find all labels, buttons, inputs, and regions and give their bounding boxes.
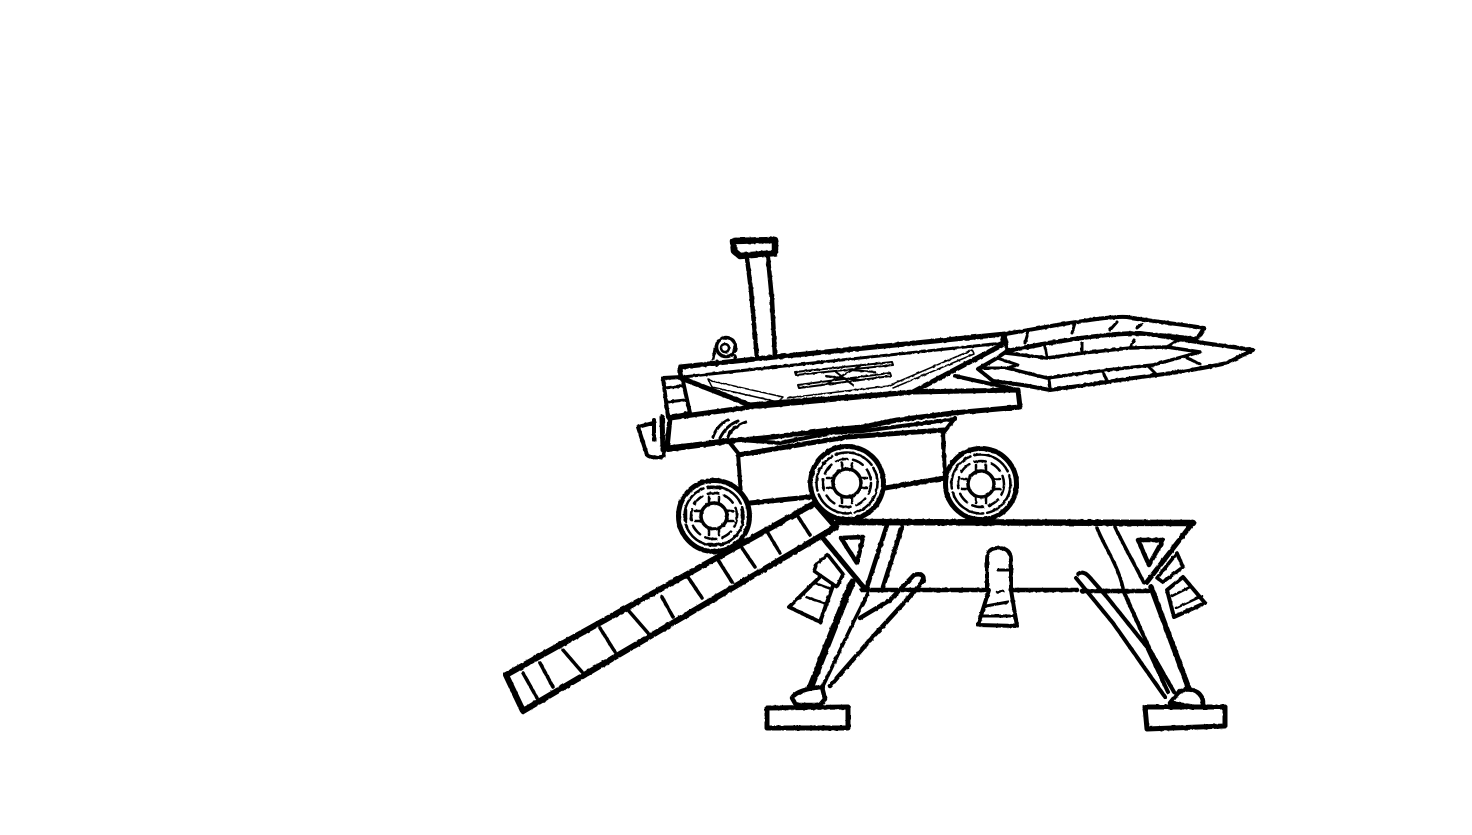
left thruster — [789, 555, 843, 622]
centre thruster — [978, 548, 1017, 626]
body panel — [680, 334, 1018, 405]
ramp — [506, 503, 836, 711]
rover chassis — [730, 418, 955, 503]
right thruster — [1157, 553, 1205, 617]
deck — [667, 390, 1020, 449]
rear hook — [638, 420, 664, 457]
solar wings — [978, 317, 1253, 390]
rover wheels — [678, 446, 1016, 552]
left landing leg — [767, 574, 923, 728]
lander body — [822, 522, 1193, 591]
wheel middle — [810, 446, 884, 520]
right landing leg — [1076, 573, 1225, 729]
mast — [733, 240, 775, 358]
camera — [713, 338, 736, 366]
wheel front — [946, 448, 1016, 520]
wheel rear — [678, 480, 750, 552]
rear blocks — [662, 377, 690, 450]
